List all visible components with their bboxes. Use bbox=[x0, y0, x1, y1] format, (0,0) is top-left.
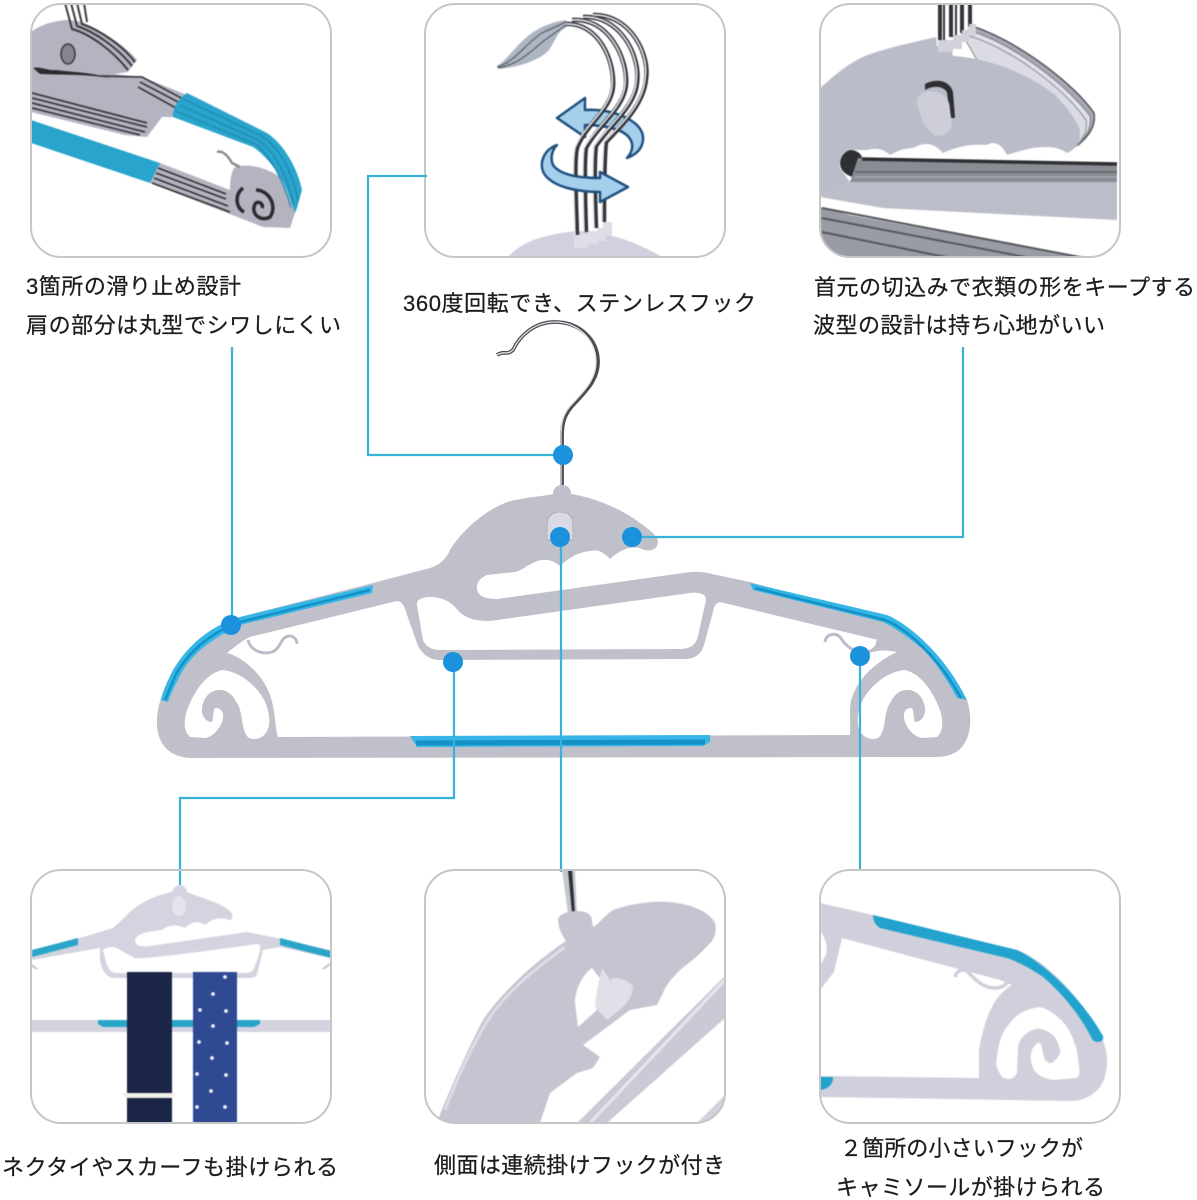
caption: side hook: 側面は連続掛けフックが付き bbox=[434, 1153, 725, 1178]
rod dark band bbox=[568, 870, 575, 913]
crown knobs bbox=[938, 24, 976, 52]
stacked crown layers bbox=[972, 26, 1094, 145]
continuous hook bbox=[595, 968, 633, 1020]
tip fan lines bbox=[497, 22, 566, 68]
crown front bbox=[820, 37, 1080, 197]
connector line: tie bar bbox=[180, 662, 454, 885]
hanger crown at bottom bbox=[507, 231, 664, 258]
bottom grip bbox=[98, 1020, 260, 1027]
hook rods bbox=[938, 3, 972, 41]
notch detail bbox=[61, 44, 75, 64]
tie dots bbox=[195, 975, 229, 1109]
notch hole bbox=[925, 81, 955, 118]
connector line: side hook bbox=[560, 537, 562, 872]
left small hook stub bbox=[31, 965, 37, 969]
marker dots bbox=[221, 445, 870, 672]
right blue grip core bbox=[755, 588, 961, 698]
lower arm with scroll bbox=[150, 163, 295, 228]
hook cutout bbox=[575, 968, 605, 1027]
stacked hooks and edges bbox=[65, 3, 135, 70]
right blue grip bbox=[750, 583, 967, 700]
crown knobs bbox=[574, 222, 612, 248]
bottom blue grip core bbox=[416, 742, 705, 743]
small hook bbox=[217, 152, 240, 167]
panel: ties hung on hanger bbox=[31, 870, 331, 1123]
caption: anti-slip line 2: 肩の部分は丸型でシワしにくい bbox=[26, 313, 341, 338]
caption: anti-slip line 1: 3箇所の滑り止め設計 bbox=[26, 274, 241, 299]
small S hook bbox=[955, 970, 1009, 988]
lower arm stripes bbox=[152, 168, 230, 212]
right scroll cutout bbox=[858, 670, 942, 739]
caption: small hooks line 2: キャミソールが掛けられる bbox=[836, 1175, 1105, 1200]
tie band bbox=[122, 1093, 176, 1098]
stacked hooks bbox=[565, 15, 647, 235]
arm stripes bbox=[32, 76, 183, 135]
connector line: small hook bbox=[859, 656, 861, 870]
caption: notch line 1: 首元の切込みで衣類の形をキープする bbox=[814, 275, 1195, 300]
small hanger body bbox=[32, 885, 330, 978]
caption: small hooks line 1: ２箇所の小さいフックが bbox=[840, 1136, 1083, 1161]
bottom bar bbox=[31, 1020, 331, 1032]
main hanger illustration bbox=[157, 322, 970, 758]
dark slot edge bbox=[33, 68, 110, 78]
left small hook bbox=[248, 636, 297, 653]
panel: neck notch and wave grip close-up bbox=[820, 3, 1120, 258]
scroll cutout bbox=[237, 188, 273, 219]
left blue grip bbox=[161, 585, 373, 702]
caption: hook: 360度回転でき、ステンレスフック bbox=[403, 291, 756, 316]
scroll cutout bbox=[996, 1007, 1079, 1080]
caption: notch line 2: 波型の設計は持ち心地がいい bbox=[813, 313, 1105, 338]
connector line: anti-slip bbox=[231, 347, 233, 625]
upper arm bbox=[31, 68, 187, 137]
crown side view bbox=[437, 902, 716, 1123]
window sliver bbox=[820, 930, 827, 965]
hook highlights bbox=[565, 15, 646, 235]
shoulder grip bbox=[873, 915, 1103, 1042]
right small hook stub bbox=[323, 964, 330, 969]
left blue grip core bbox=[165, 590, 370, 700]
pivot pill bbox=[172, 896, 186, 916]
upper window bbox=[417, 593, 706, 650]
small hanger window bbox=[103, 944, 260, 973]
navy tie bbox=[127, 972, 172, 1123]
dotted blue tie bbox=[193, 972, 237, 1123]
right small hook bbox=[825, 634, 878, 653]
hook pill bbox=[917, 91, 952, 136]
steel rod bbox=[562, 870, 577, 913]
open area left of scroll bbox=[820, 938, 1012, 1078]
bottom blue grip bbox=[410, 735, 710, 747]
arm stripes bbox=[850, 158, 1117, 182]
connector line: notch bbox=[632, 347, 963, 537]
lower striped arm bbox=[820, 207, 1085, 258]
hanger shoulder body bbox=[820, 903, 1107, 1101]
slot opening bbox=[839, 149, 863, 178]
upper blue grip ridges bbox=[176, 99, 298, 208]
left shoulder grip bbox=[32, 938, 78, 957]
lower blue grip bbox=[31, 120, 160, 183]
large lower opening bbox=[227, 601, 897, 737]
hook tip fan bbox=[497, 20, 566, 69]
arm bbox=[820, 182, 1117, 220]
left scroll cutout bbox=[185, 670, 269, 739]
lower rotation arrow bbox=[542, 145, 628, 202]
panel: small hooks close-up bbox=[820, 870, 1120, 1123]
steel hook bbox=[497, 322, 598, 487]
right shoulder grip bbox=[280, 938, 331, 958]
upper blue grip bbox=[173, 93, 302, 213]
hanger body bbox=[157, 485, 970, 758]
panel: rotating stainless hook close-up bbox=[425, 4, 725, 258]
connector line: hook bbox=[368, 176, 563, 455]
upper rotation arrow bbox=[557, 98, 643, 158]
right arm bbox=[577, 976, 725, 1123]
hook pivot pill bbox=[547, 512, 573, 540]
right arm highlight bbox=[590, 980, 725, 1123]
caption: ties: ネクタイやスカーフも掛けられる bbox=[2, 1155, 338, 1180]
bottom grip end bbox=[820, 1077, 833, 1090]
stacked hanger crown bbox=[31, 20, 137, 76]
lower corner arm bbox=[697, 1095, 725, 1123]
panel: side continuous hook close-up bbox=[425, 870, 725, 1123]
panel: anti-slip shoulder close-up bbox=[31, 3, 331, 257]
crown highlight edge bbox=[445, 947, 565, 1110]
